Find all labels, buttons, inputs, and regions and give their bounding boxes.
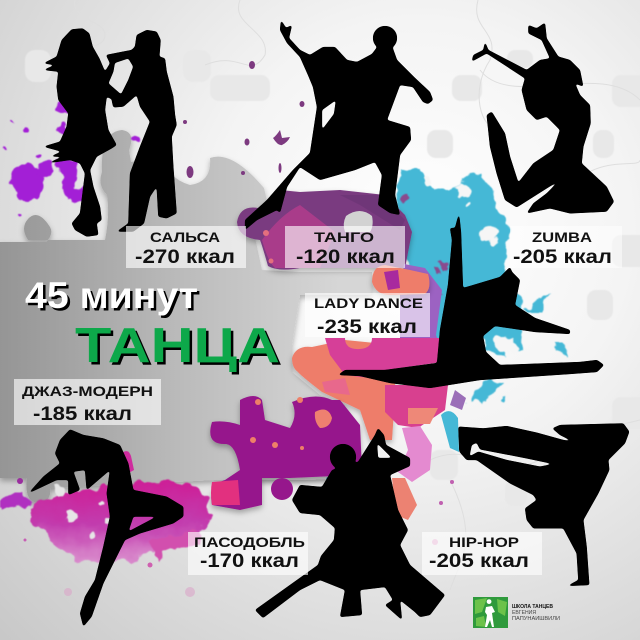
label: lady dance — [305, 293, 430, 338]
salsa man — [106, 30, 177, 232]
logo: dance school: ПАПУНАИШВИЛИ — [512, 616, 560, 622]
splash: magenta lower — [0, 451, 454, 597]
label: jazz-modern — [14, 379, 161, 425]
label: lady dance: -235 ккал — [317, 317, 417, 338]
silhouette: paso doble couple — [255, 428, 445, 620]
salsa woman — [43, 28, 122, 237]
logo: dance school — [473, 597, 560, 628]
grey puzzle gap — [0, 130, 372, 503]
silhouette: jazz-modern dancer — [28, 429, 183, 627]
label: paso doble: ПАСОДОБЛЬ — [194, 534, 305, 550]
silhouette: tango couple — [245, 20, 433, 230]
label: salsa — [126, 226, 246, 268]
label: paso doble: -170 ккал — [200, 551, 299, 572]
silhouette: lady dance leap — [338, 213, 604, 388]
label: hip-hop: -205 ккал — [429, 551, 529, 572]
label: tango — [285, 226, 405, 268]
label: zumba: ZUMBA — [532, 229, 592, 245]
logo: dance school: ЕВГЕНИЯ — [512, 610, 536, 616]
label: hip-hop: HIP-HOP — [449, 534, 519, 550]
label: hip-hop — [422, 532, 542, 575]
label: paso doble — [188, 532, 308, 575]
title: 45 minutes: 45 минут — [25, 275, 198, 316]
splash: magenta puzzle piece — [210, 396, 362, 510]
title: dance: ТАНЦА — [78, 322, 282, 376]
label: tango: -120 ккал — [296, 247, 395, 268]
splash: central pink and orchid — [292, 264, 466, 520]
silhouette: zumba jumper — [472, 23, 614, 213]
splash: left violet — [4, 103, 136, 216]
silhouette: salsa couple — [43, 28, 177, 237]
label: zumba — [510, 226, 622, 268]
title: dance: ТАНЦА — [75, 319, 280, 373]
label: jazz-modern: -185 ккал — [33, 404, 132, 425]
label: salsa: -270 ккал — [135, 247, 235, 268]
silhouette: hip-hop freeze — [458, 423, 629, 586]
label: jazz-modern: ДЖАЗ-МОДЕРН — [22, 383, 153, 399]
splash: teal — [396, 168, 566, 405]
label: tango: ТАНГО — [314, 229, 374, 245]
label: zumba: -205 ккал — [513, 247, 612, 268]
splash: tango purple puzzle piece — [237, 190, 412, 270]
title: 45 minutes: 45 минут — [28, 278, 200, 318]
label: lady dance: LADY DANCE — [314, 295, 423, 311]
label: salsa: САЛЬСА — [150, 229, 220, 245]
splash: tango drops — [183, 61, 304, 178]
logo: dance school: ШКОЛА ТАНЦЕВ — [512, 604, 553, 610]
